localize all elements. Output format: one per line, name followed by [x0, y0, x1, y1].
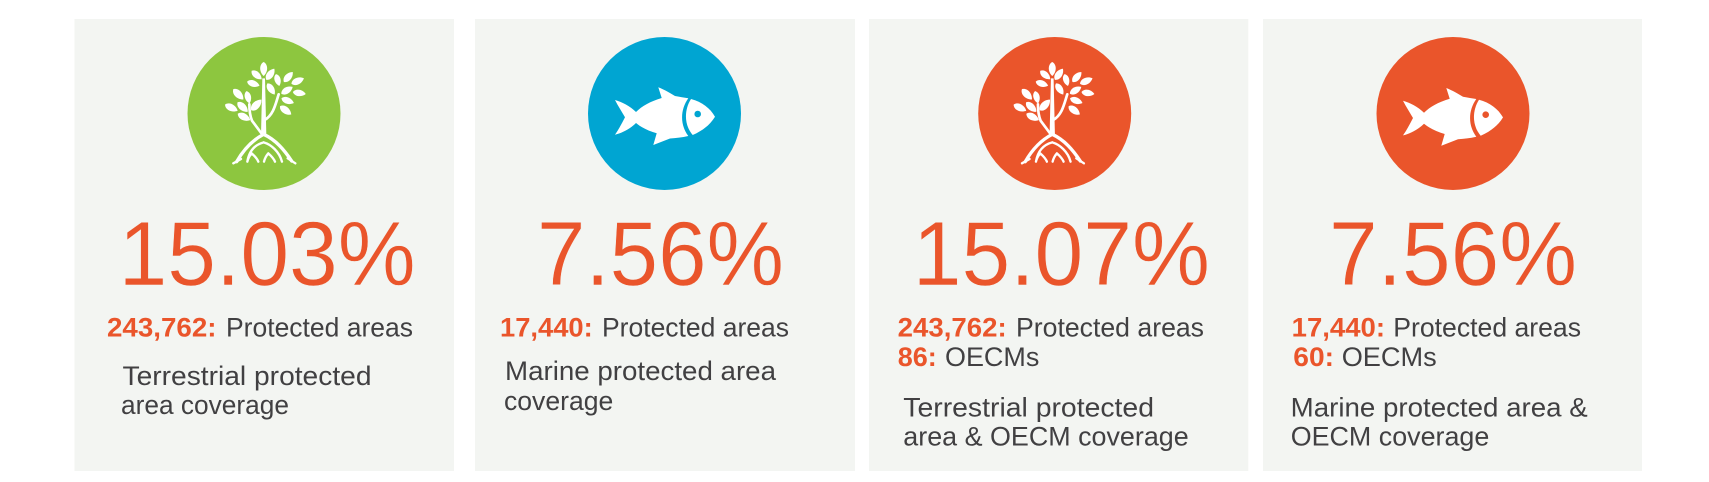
icon: fish in blue circle	[588, 37, 741, 190]
protected areas and OECM counts	[898, 313, 1204, 372]
big percentage: 15.07%	[913, 204, 1210, 305]
panel: terrestrial protected area and OECM coverage	[869, 19, 1248, 471]
protected areas and OECM counts: OECMs	[945, 342, 1039, 372]
protected areas count: 243,762:	[107, 313, 216, 343]
protected areas and OECM counts: OECMs	[1342, 342, 1437, 372]
protected areas count	[500, 313, 789, 343]
description	[1291, 393, 1588, 452]
icon: mangrove tree in green circle	[188, 37, 340, 190]
description	[504, 356, 777, 416]
big percentage: 15.03%	[119, 204, 416, 305]
description: area & OECM coverage	[903, 422, 1189, 452]
icon: fish in orange circle	[1376, 37, 1530, 190]
protected areas and OECM counts: Protected areas	[1016, 313, 1204, 343]
protected areas and OECM counts: 60:	[1293, 342, 1334, 372]
description	[121, 361, 372, 420]
description: Marine protected area	[505, 356, 777, 386]
description	[903, 393, 1189, 452]
description: OECM coverage	[1291, 422, 1489, 452]
protected areas count: Protected areas	[602, 313, 789, 343]
description: Terrestrial protected	[903, 393, 1154, 423]
protected areas and OECM counts: 86:	[898, 342, 937, 372]
description: Marine protected area &	[1291, 393, 1588, 423]
protected areas count: Protected areas	[226, 313, 413, 343]
protected areas count	[107, 313, 413, 343]
icon: mangrove tree in orange circle	[978, 37, 1131, 190]
protected areas and OECM counts: Protected areas	[1393, 313, 1581, 343]
big percentage: 7.56%	[537, 204, 784, 305]
panel: terrestrial protected area coverage	[74, 19, 454, 471]
protected areas and OECM counts	[1292, 313, 1581, 372]
description: Terrestrial protected	[122, 361, 372, 391]
big percentage: 7.56%	[1329, 204, 1577, 305]
panel: marine protected area and OECM coverage	[1263, 19, 1642, 471]
description: area coverage	[121, 390, 289, 420]
description: coverage	[504, 386, 613, 416]
protected areas and OECM counts: 243,762:	[898, 313, 1007, 343]
protected areas count: 17,440:	[500, 313, 593, 343]
protected areas and OECM counts: 17,440:	[1292, 313, 1385, 343]
panel: marine protected area coverage	[475, 19, 855, 471]
